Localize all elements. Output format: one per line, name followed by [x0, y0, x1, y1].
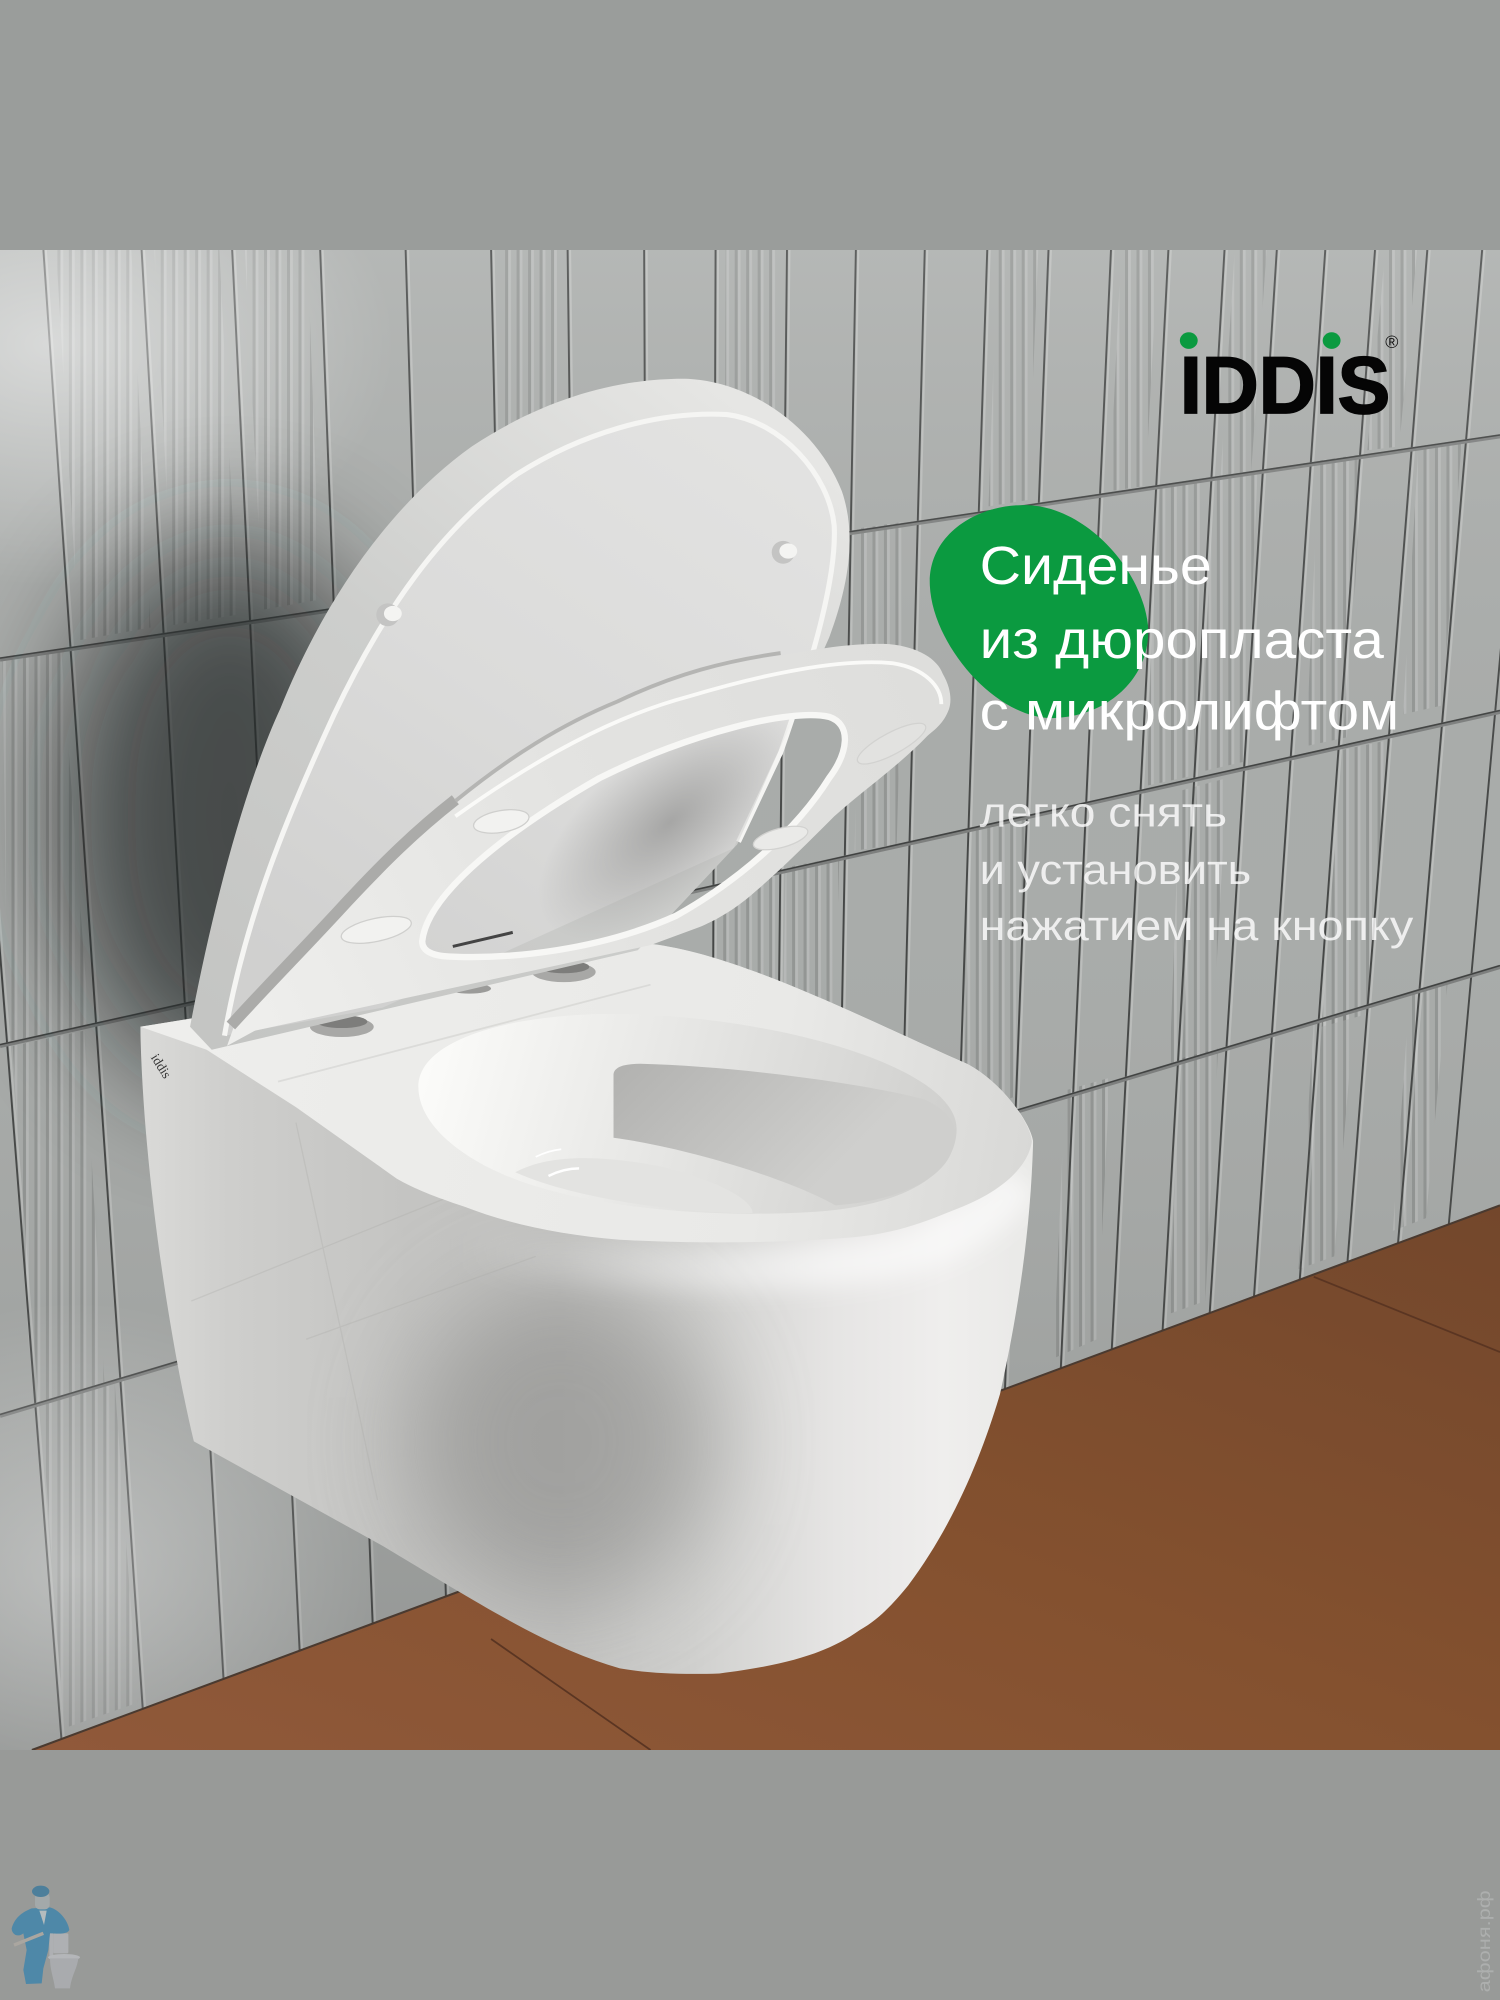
lid peg left — [376, 603, 402, 626]
seat edge shadow — [231, 800, 455, 1026]
subheading: легко снять — [980, 789, 1227, 836]
subheading: и установить — [980, 846, 1251, 893]
bottom grey band — [0, 1750, 1500, 2000]
subheading: нажатием на кнопку — [980, 902, 1413, 949]
lid peg right — [772, 541, 797, 564]
seat bumper 3 — [339, 911, 414, 949]
lid inner face — [224, 414, 834, 1036]
toilet bowl — [128, 931, 1046, 1696]
open seat ring — [227, 644, 950, 1046]
inner recess — [614, 1064, 955, 1205]
metal hinges — [310, 960, 596, 1037]
seat bumper 1 — [472, 806, 531, 837]
heading — [980, 537, 1399, 742]
seat hole rim — [422, 715, 845, 957]
open lid — [190, 379, 850, 1050]
green blob — [930, 505, 1148, 718]
logo dot 1 — [1180, 332, 1198, 349]
bowl top surface — [140, 944, 1032, 1242]
bowl opening — [418, 1014, 957, 1214]
wall lighting — [0, 250, 1500, 1750]
seat edge shadow upper — [455, 653, 781, 801]
top grey band — [0, 0, 1500, 250]
heading: с микролифтом — [980, 683, 1399, 742]
small brand mark on bowl: iddis — [148, 1051, 174, 1081]
logo dot 2 — [1323, 332, 1341, 349]
tile joints — [0, 250, 1500, 1786]
seat bumper 2 — [751, 822, 810, 855]
registered mark: ® — [1385, 332, 1398, 352]
seat bumper 4 — [853, 716, 930, 771]
water well — [515, 1158, 753, 1213]
heading: Сиденье — [980, 537, 1212, 596]
subheading — [980, 789, 1413, 949]
logo IDDIS: IDDIS — [1180, 341, 1390, 431]
lid inner band — [224, 414, 834, 1036]
watermark: plumber with toilet — [12, 1886, 80, 1988]
heading: из дюропласта — [980, 611, 1384, 670]
watermark: vertical site name: афоня.рф — [1474, 1890, 1494, 1992]
ribbed tiles — [3, 250, 1462, 1728]
floor — [32, 1205, 1500, 1750]
seat lip — [455, 662, 941, 816]
bowl body — [128, 931, 1046, 1696]
lid shadow — [452, 725, 784, 948]
